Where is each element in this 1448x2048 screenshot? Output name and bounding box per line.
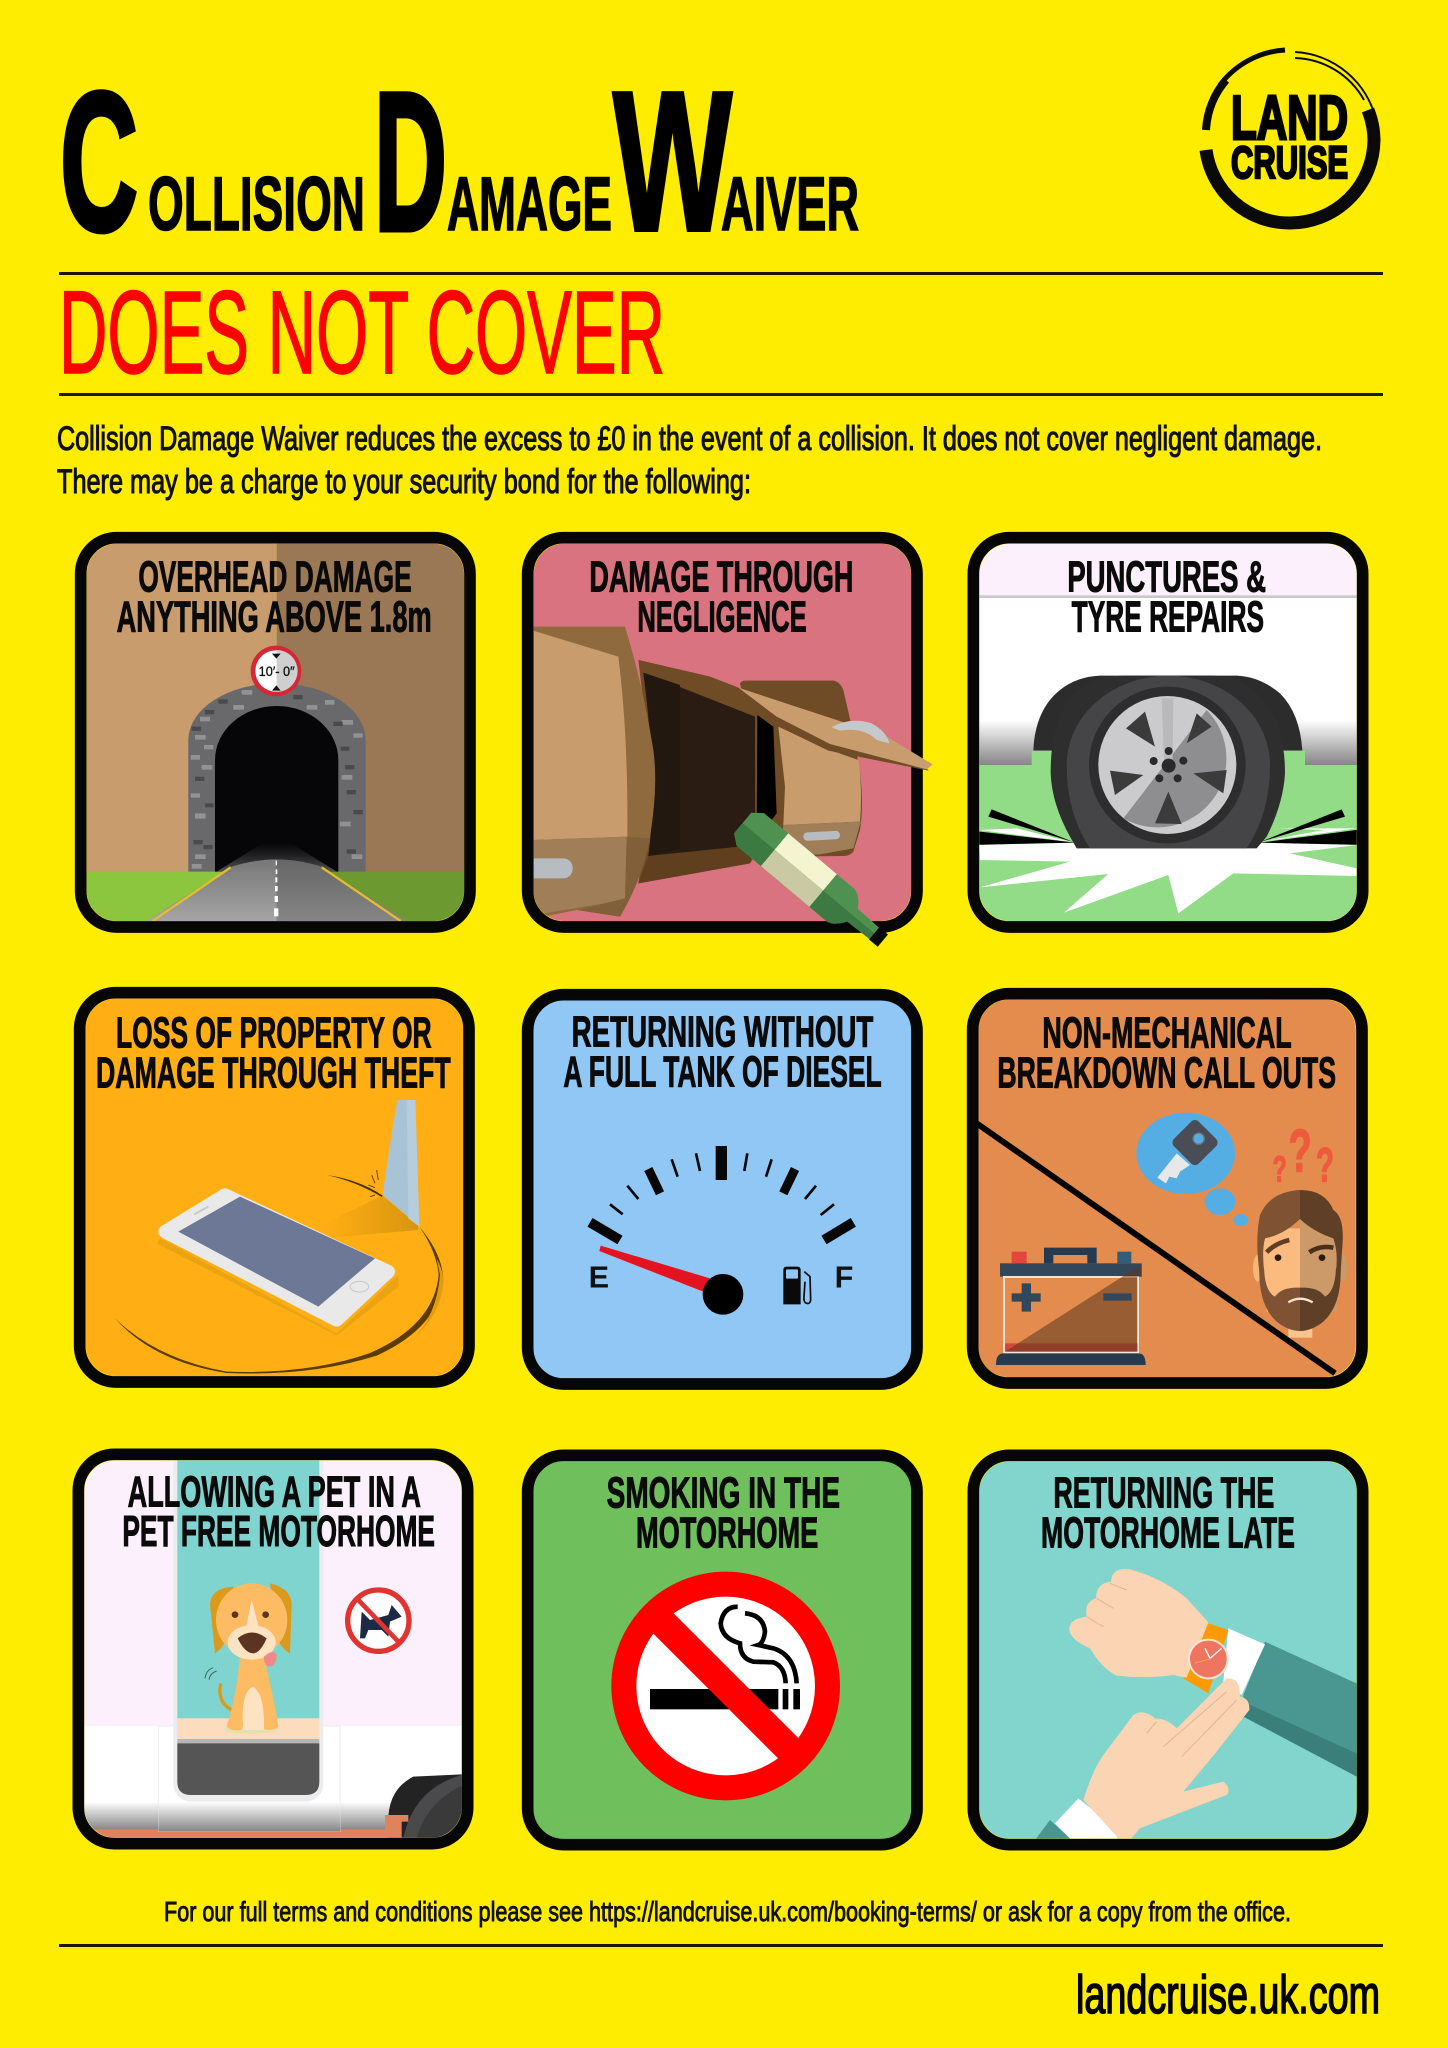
motorhome door illustration [84,1460,462,1838]
title: Collision Damage Waiver: AMAGE [447,162,612,247]
panel: damage through negligence [522,532,933,957]
panel: punctures and tyre repairs [967,532,1368,933]
panel title: RETURNING THE [1053,1469,1274,1518]
panel title: TYRE REPAIRS [1072,593,1264,642]
fuel gauge: F [835,1260,853,1294]
title: Collision Damage Waiver [60,51,859,273]
panel: returning without a full tank [528,995,917,1384]
panel border [528,995,917,1384]
panel title: DAMAGE THROUGH [589,553,853,602]
panel border [528,1455,917,1845]
car battery [996,1248,1146,1365]
panel title: ALLOWING A PET IN A [128,1467,421,1516]
panel border [973,1455,1363,1845]
panel border [78,1454,468,1844]
panel background [528,995,917,1384]
intro text: There may be a charge to your security bond for the following: [57,463,751,501]
thought bubble with key [1136,1113,1248,1226]
panel title [1041,1469,1295,1558]
panel title: LOSS OF PROPERTY OR [116,1009,432,1058]
panel title [997,1009,1336,1098]
battery, key and confused man illustration [978,1000,1356,1377]
panel title [607,1469,840,1558]
panel title [96,1009,451,1098]
logo: Land Cruise [1206,50,1376,223]
wristwatch illustration [979,1461,1357,1839]
panel border [973,994,1362,1383]
title: Collision Damage Waiver: AIVER [721,162,859,247]
phone being cut out illustration [86,998,463,1376]
panel: smoking in the motorhome [528,1455,917,1845]
question marks [1273,1128,1333,1182]
panel title [589,553,853,642]
logo: Land Cruise: LAND [1231,84,1348,153]
panel border [80,993,469,1382]
panel: pet in a pet free motorhome [73,1448,473,1849]
height limit sign [251,646,301,696]
heading: Does not cover: DOES NOT COVER [59,267,665,399]
title: Collision Damage Waiver: C [60,51,138,272]
wine bottle [729,807,897,957]
open van door illustration [534,544,911,921]
panel border [973,538,1363,927]
panel title [117,553,432,642]
panel title: MOTORHOME LATE [1041,1509,1295,1558]
intro text [57,420,1322,501]
panel title: DAMAGE THROUGH THEFT [96,1049,451,1098]
no dogs sign [348,1590,409,1651]
panel title: OVERHEAD DAMAGE [138,553,412,602]
panel: loss of property or theft [73,987,474,1388]
height limit sign: 10′- 0″ [259,663,295,679]
no smoking sign [611,1572,840,1800]
panel title [122,1467,435,1556]
panel title: SMOKING IN THE [607,1469,840,1518]
open door [638,660,933,771]
flat tyre illustration [979,544,1357,921]
panel: returning the motorhome late [967,1450,1367,1850]
panel title: PET FREE MOTORHOME [122,1507,435,1556]
panel title: A FULL TANK OF DIESEL [563,1048,882,1097]
fuel gauge [589,1146,853,1315]
panel title [1067,553,1266,642]
title: Collision Damage Waiver: D [374,51,447,272]
panel title: NEGLIGENCE [637,593,807,642]
panel title: ANYTHING ABOVE 1.8m [117,593,432,642]
title: Collision Damage Waiver: W [613,51,732,273]
panel title: RETURNING WITHOUT [572,1008,874,1057]
panel border [528,538,917,927]
panel: non-mechanical breakdown call outs [967,988,1367,1388]
panel background [528,1455,917,1845]
dog [205,1583,292,1734]
panel title: PUNCTURES & [1067,553,1266,602]
panel: overhead damage [75,532,477,938]
question marks: ? [1273,1149,1287,1190]
fuel gauge: E [589,1260,609,1294]
panel title: MOTORHOME [636,1509,818,1558]
question marks: ? [1288,1118,1312,1185]
panel title: NON-MECHANICAL [1042,1009,1292,1058]
panel border [81,538,470,927]
title: Collision Damage Waiver: OLLISION [148,162,365,247]
question marks: ? [1316,1139,1334,1193]
bearded man [1253,1190,1347,1338]
logo: Land Cruise: CRUISE [1231,137,1348,188]
panel title [563,1008,882,1097]
tunnel illustration [86,544,464,921]
